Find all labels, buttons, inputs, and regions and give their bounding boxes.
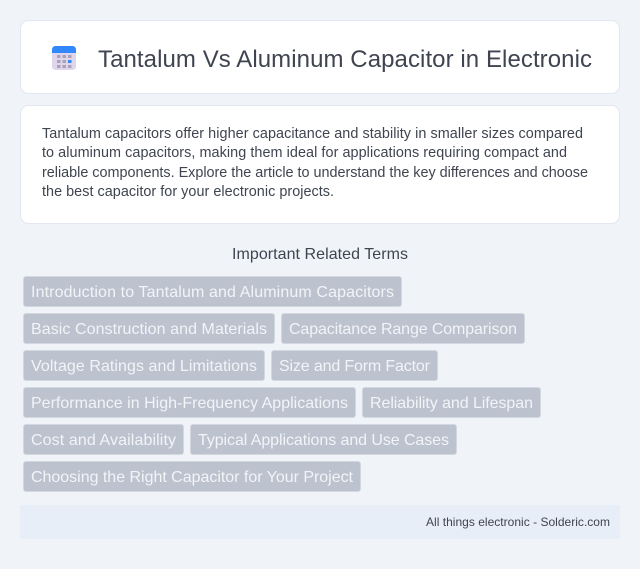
text block: intro: the best capacitor for your electronic projects. (42, 184, 334, 200)
chip: Typical Applications and Use Cases (198, 432, 449, 449)
text block: intro: to aluminum capacitors, making them ideal for applications requiring compact and (42, 145, 567, 161)
panel: footer (20, 505, 620, 539)
chip (24, 350, 264, 380)
text block: intro: reliable components. Explore the article to understand the key differences and choose (42, 165, 588, 181)
chip: Choosing the Right Capacitor for Your Project (31, 469, 354, 486)
chip (24, 276, 402, 306)
chip: Basic Construction and Materials (31, 321, 267, 338)
heading: related terms: Important Related Terms (232, 246, 408, 263)
chip (24, 424, 184, 454)
title: Tantalum Vs Aluminum Capacitor in Electronic (98, 46, 592, 73)
chip (272, 350, 438, 380)
chip: Reliability and Lifespan (370, 395, 533, 412)
chip: Capacitance Range Comparison (289, 321, 517, 338)
chip (24, 462, 360, 492)
chip (362, 388, 540, 418)
panel: header card (20, 20, 620, 94)
chip: Introduction to Tantalum and Aluminum Capacitors (31, 284, 394, 301)
chip: Cost and Availability (31, 432, 176, 449)
footer text: All things electronic - Solderic.com (426, 515, 610, 529)
chip: Voltage Ratings and Limitations (31, 358, 257, 375)
chip: Performance in High-Frequency Applications (31, 395, 348, 412)
chip (190, 424, 456, 454)
chip: Size and Form Factor (279, 358, 431, 375)
panel: intro paragraph (20, 106, 620, 224)
icon: calendar grid (52, 46, 76, 70)
chip (24, 314, 274, 344)
chip (24, 388, 356, 418)
chip (282, 314, 524, 344)
panel: term chips (24, 276, 540, 492)
text block: intro: Tantalum capacitors offer higher capacitance and stability in smaller sizes compared (42, 126, 583, 142)
